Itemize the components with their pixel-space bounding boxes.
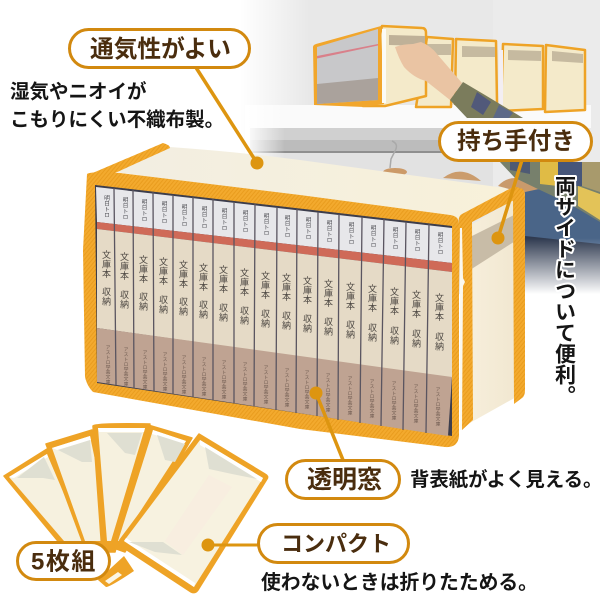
book 13: 文庫本 [345, 281, 355, 311]
folded box 5 [119, 434, 268, 593]
text: breathable non-woven description: こもりにくい不織布製。 [10, 109, 224, 131]
mini box 4 [499, 44, 543, 111]
book 10: 収納 [281, 311, 291, 330]
book 12: 明日トロ [325, 220, 332, 243]
book 14: 文庫本 [367, 283, 377, 313]
book 3 [138, 199, 148, 391]
book 4: 文庫本 [158, 256, 168, 286]
book 17 [434, 232, 444, 428]
book 6: 収納 [198, 300, 208, 319]
person: shirt and jeans behind the label [500, 162, 600, 295]
book 16: 明日トロ [413, 229, 420, 252]
book 17: 文庫本 [434, 292, 444, 322]
label: 5枚組: 5枚組 [31, 548, 97, 576]
book 11: 収納 [302, 314, 312, 333]
book 16 [411, 229, 421, 425]
book 6: 文庫本 [198, 262, 208, 292]
book 17: 明日トロ [436, 232, 443, 255]
mini boxes on the shelf [313, 26, 585, 112]
book 1: 文庫本 [101, 249, 111, 279]
book 11: 文庫本 [302, 275, 312, 305]
text: spine labels visible: 背表紙がよく見える。 [410, 468, 600, 491]
book 1: アストロ学芸文庫 [104, 345, 110, 386]
book 12: アストロ学芸文庫 [324, 373, 330, 414]
leader: compact [202, 538, 258, 552]
folded box 3 [93, 424, 150, 552]
label: 通気性がよい: 通気性がよい [90, 35, 231, 63]
book 13: 明日トロ [347, 222, 354, 245]
book 2: アストロ学芸文庫 [122, 347, 128, 388]
book 16: アストロ学芸文庫 [412, 384, 418, 425]
leader: breathable [195, 66, 264, 170]
leader: window [310, 386, 343, 460]
book 11: アストロ学芸文庫 [304, 370, 309, 411]
book 1 [101, 195, 111, 386]
book 7: 収納 [218, 303, 228, 322]
mini box 2 [416, 37, 453, 107]
book 5 [178, 204, 188, 396]
book 8: 明日トロ [241, 210, 248, 233]
book 10: 明日トロ [283, 215, 290, 238]
book 10 [281, 215, 291, 409]
mini box 3 [455, 39, 497, 104]
book 6: 明日トロ [200, 206, 207, 229]
book 12: 収納 [323, 317, 333, 336]
label: 透明窓 [286, 460, 400, 498]
box top panel [115, 147, 517, 220]
hangers on the rail [383, 141, 540, 196]
book 17: アストロ学芸文庫 [434, 387, 440, 428]
book 1: 収納 [101, 287, 111, 306]
book 14: 収納 [367, 323, 377, 342]
box top-left orange edge [88, 143, 170, 175]
book 11: 明日トロ [304, 217, 311, 240]
mini box 5 [545, 45, 585, 112]
book 17: 収納 [434, 332, 444, 351]
arm reaching for handle [395, 42, 523, 118]
book 2: 文庫本 [119, 251, 129, 281]
book 7 [218, 208, 228, 401]
white fades over the photo [240, 238, 600, 306]
book 5: アストロ学芸文庫 [180, 355, 186, 396]
book spines [95, 185, 452, 436]
book 14: 明日トロ [369, 225, 376, 248]
book 6 [198, 206, 208, 398]
book 15 [389, 227, 399, 422]
book 7: アストロ学芸文庫 [220, 360, 226, 401]
folded box 4 [111, 425, 192, 552]
book 1: 明日トロ [102, 195, 109, 218]
book 16: 文庫本 [411, 289, 421, 319]
book 15: アストロ学芸文庫 [390, 381, 396, 422]
book 3: 文庫本 [138, 254, 148, 284]
book 10: アストロ学芸文庫 [284, 368, 289, 409]
book 6: アストロ学芸文庫 [200, 357, 206, 398]
mini box 1 with spines [313, 26, 426, 107]
book 9 [260, 213, 270, 406]
book 9: 明日トロ [262, 213, 269, 236]
book 8: 文庫本 [239, 267, 249, 297]
book 13: 収納 [345, 320, 355, 339]
book 3: 収納 [138, 292, 148, 311]
book 9: アストロ学芸文庫 [262, 365, 268, 406]
label: 持ち手付き [440, 122, 592, 160]
side handle strap [470, 212, 520, 270]
book 4 [158, 201, 168, 393]
book 13: アストロ学芸文庫 [346, 376, 352, 417]
label: コンパクト: コンパクト [281, 532, 391, 556]
book 10: 文庫本 [281, 272, 291, 302]
book 2: 収納 [119, 290, 129, 309]
book 2: 明日トロ [121, 197, 128, 220]
book 14 [367, 225, 377, 420]
book 4: 明日トロ [160, 201, 167, 224]
label: 透明窓: 透明窓 [307, 466, 382, 494]
stacked lower edges [98, 556, 134, 587]
leader: handle [492, 160, 522, 244]
folded box 1 [4, 449, 92, 546]
book 4: アストロ学芸文庫 [162, 352, 167, 393]
vertical text: handles on both sides: 両サイドについて便利。 [552, 175, 576, 406]
book 3: アストロ学芸文庫 [142, 350, 147, 391]
book 12 [323, 220, 333, 414]
book 5: 文庫本 [178, 259, 188, 289]
book 7: 明日トロ [220, 208, 227, 231]
label: 通気性がよい [70, 30, 250, 68]
book 7: 文庫本 [218, 264, 228, 294]
label: コンパクト [258, 524, 408, 562]
book 15: 文庫本 [389, 286, 399, 316]
text: folds away when unused: 使わないときは折りたためる。 [261, 572, 538, 594]
book 8: 収納 [239, 306, 249, 325]
text: breathable non-woven description [10, 80, 224, 131]
book 4: 収納 [158, 295, 168, 314]
book 8 [239, 210, 249, 403]
book 14: アストロ学芸文庫 [368, 379, 374, 420]
book 12: 文庫本 [323, 278, 333, 308]
text: breathable non-woven description: 湿気やニオイが [10, 80, 147, 103]
book 9: 文庫本 [260, 270, 270, 300]
book 8: アストロ学芸文庫 [242, 362, 247, 403]
front orange frame [83, 172, 459, 447]
folded box 2 [46, 430, 122, 546]
book 9: 収納 [260, 309, 270, 328]
label: 5枚組 [18, 542, 110, 580]
book 11 [302, 217, 312, 411]
book 15: 収納 [389, 326, 399, 345]
book 16: 収納 [411, 329, 421, 348]
label: 持ち手付き: 持ち手付き [457, 128, 575, 155]
folded boxes fan [4, 424, 268, 593]
book 3: 明日トロ [140, 199, 147, 222]
book 2 [119, 197, 129, 388]
storage box with books [83, 143, 525, 447]
book 5: 収納 [178, 297, 188, 316]
book 13 [345, 222, 355, 417]
book 15: 明日トロ [391, 227, 398, 250]
leader lines and dots [195, 66, 522, 552]
book 5: 明日トロ [180, 204, 187, 227]
photo background: closet wall and shelf [240, 0, 600, 300]
box side panel [459, 187, 525, 430]
